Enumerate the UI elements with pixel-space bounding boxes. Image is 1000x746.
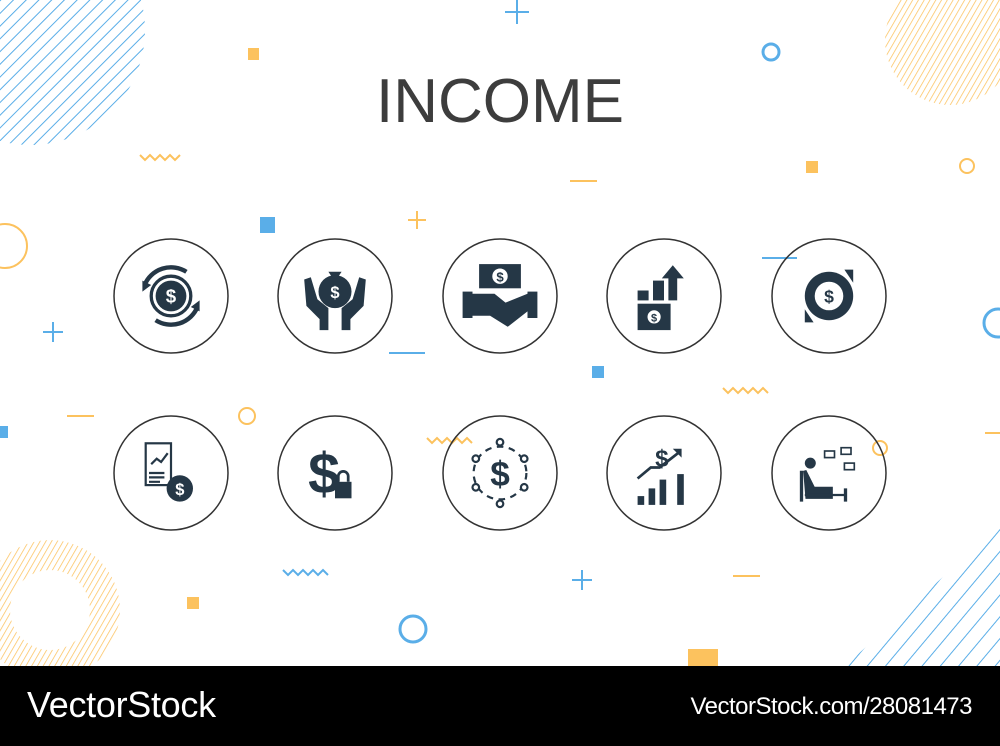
icon: money cycle bbox=[114, 239, 228, 353]
icon: dollar network: $ bbox=[490, 455, 510, 494]
icon: dollar lock: $ bbox=[308, 442, 340, 506]
decoration: bottom-left orange hatched ring bbox=[0, 540, 120, 680]
icon: income growth bbox=[607, 416, 721, 530]
icon: dollar lock bbox=[278, 416, 392, 530]
icon: financial report: $ bbox=[175, 481, 184, 499]
icon: handshake deal: $ bbox=[496, 270, 504, 285]
icon: passive income relaxing bbox=[772, 416, 886, 530]
footer: url: VectorStock.com/28081473 bbox=[690, 693, 972, 720]
icon: financial report bbox=[114, 416, 228, 530]
decoration: top-left blue hatched circle bbox=[0, 0, 145, 145]
icon: money growth chart: $ bbox=[651, 312, 657, 324]
icon: money growth chart bbox=[607, 239, 721, 353]
icon: money bag in hands: $ bbox=[330, 284, 340, 302]
icon: money cycle: $ bbox=[166, 286, 177, 307]
icon: money exchange bbox=[772, 239, 886, 353]
icon: handshake deal bbox=[443, 239, 557, 353]
icon: money bag in hands bbox=[278, 239, 392, 353]
icon: income growth: $ bbox=[655, 445, 669, 472]
icon: money exchange: $ bbox=[824, 287, 834, 307]
decoration: top-right orange hatched circle bbox=[885, 0, 1000, 105]
icon: dollar network bbox=[443, 416, 557, 530]
footer bar bbox=[0, 666, 1000, 746]
title: INCOME bbox=[376, 67, 624, 136]
decoration: bottom-right blue stripes bbox=[845, 525, 1000, 666]
footer: brand: VectorStock bbox=[27, 684, 216, 725]
